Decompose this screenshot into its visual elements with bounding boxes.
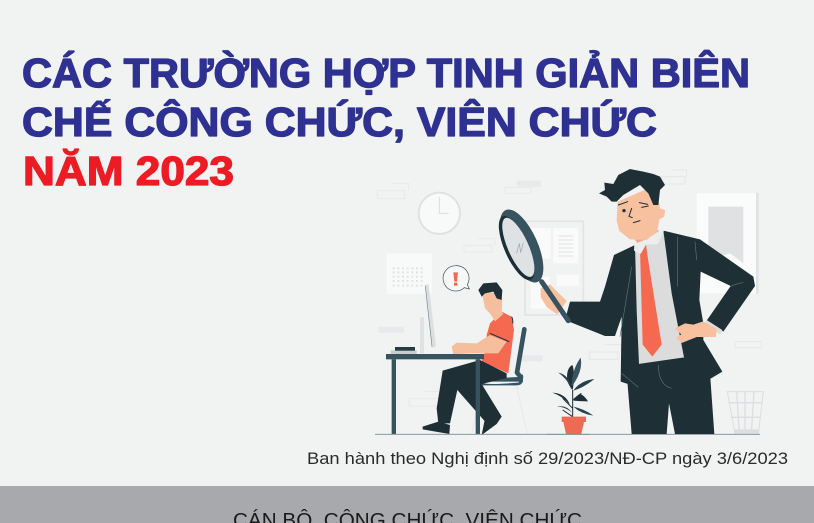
person: manager with magnifier	[491, 169, 755, 434]
potted plant	[552, 358, 594, 434]
person: seated employee	[423, 282, 514, 435]
icon: wall calendar	[387, 253, 432, 294]
floor line	[375, 433, 590, 436]
framed picture	[697, 193, 759, 294]
cuff	[705, 320, 722, 335]
neck and collar	[635, 230, 662, 247]
title	[22, 50, 750, 194]
jacket	[565, 231, 755, 387]
shirt	[482, 312, 514, 373]
sleeve	[490, 317, 513, 342]
illustration: background office decor	[375, 181, 590, 435]
trousers	[627, 357, 714, 434]
title: CHẾ CÔNG CHỨC, VIÊN CHỨC	[22, 99, 657, 145]
head	[482, 292, 502, 315]
hand on hip	[675, 321, 717, 343]
magnifying glass	[491, 204, 568, 321]
chair	[472, 329, 527, 433]
arm	[452, 335, 507, 354]
floor line right	[547, 433, 760, 436]
icon: pinboard with papers	[525, 221, 583, 315]
trousers	[437, 360, 507, 423]
decree caption: Ban hành theo Nghị định số 29/2023/NĐ-CP ngày 3/6/2023	[307, 449, 788, 468]
face	[617, 185, 665, 240]
icon: computer monitor	[420, 284, 436, 353]
hand holding handle	[541, 284, 567, 314]
wastebasket	[727, 392, 763, 434]
shoes	[423, 422, 450, 434]
icon: wall clock	[419, 193, 460, 234]
decor bricks	[589, 170, 762, 359]
necktie	[640, 245, 662, 357]
icon: alert speech bubble	[443, 266, 469, 291]
icon: books on desk	[391, 347, 417, 354]
desk	[386, 354, 484, 434]
hair	[599, 169, 665, 205]
title: NĂM 2023	[23, 148, 234, 194]
shirt	[635, 231, 684, 364]
title: CÁC TRƯỜNG HỢP TINH GIẢN BIÊN	[22, 50, 750, 96]
grey section band	[0, 486, 814, 523]
